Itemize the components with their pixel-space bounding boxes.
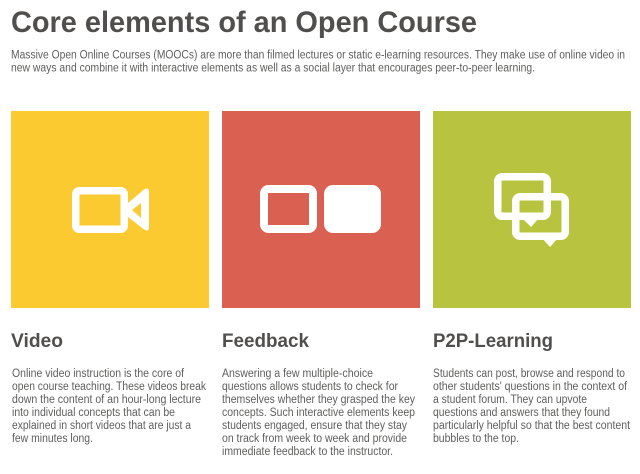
green tile: [433, 111, 631, 308]
video description: Online video instruction is the core of: [12, 368, 185, 380]
feedback description: on track from week to week and provide: [222, 433, 407, 445]
video description: into individual concepts that can be: [12, 407, 175, 419]
feedback description: Answering a few multiple-choice: [222, 368, 373, 380]
feedback description: themselves whether they grasped the key: [222, 394, 415, 406]
p2p description: questions and answers that they found: [433, 407, 610, 419]
feedback description: immediate feedback to the instructor.: [222, 446, 393, 458]
title: Core elements of an Open Course: [11, 6, 477, 39]
panel: p2p learning: [433, 111, 631, 445]
heading: feedback: Feedback: [222, 330, 309, 352]
heading: p2p learning: P2P-Learning: [433, 330, 553, 352]
red tile: [222, 111, 420, 308]
panel: feedback: [222, 111, 420, 458]
p2p description: a student forum. They can upvote: [433, 394, 587, 406]
feedback description: [222, 368, 415, 458]
video description: open course teaching. These videos break: [12, 381, 206, 393]
icon: feedback cards: [264, 185, 381, 233]
feedback description: students engaged, ensure that they stay: [222, 420, 407, 432]
icon: chat bubbles: [498, 177, 565, 247]
intro text: [11, 50, 625, 74]
panel: video: [11, 111, 209, 445]
p2p description: [433, 368, 631, 445]
feedback description: concepts. Such interactive elements keep: [222, 407, 415, 419]
feedback description: questions allows students to check for: [222, 381, 398, 393]
video description: down the content of an hour-long lecture: [12, 394, 201, 406]
video description: few minutes long.: [12, 433, 93, 445]
icon: video camera: [76, 188, 149, 231]
yellow tile: [11, 111, 209, 308]
intro text: new ways and combine it with interactive elements as well as a social layer that encourages peer-to-peer learning.: [11, 62, 535, 74]
video description: explained in short videos that are just a: [12, 420, 192, 432]
video description: [12, 368, 206, 445]
p2p description: bubbles to the top.: [433, 433, 519, 445]
heading: video: Video: [11, 330, 63, 352]
p2p description: other students' questions in the context of: [433, 381, 628, 393]
